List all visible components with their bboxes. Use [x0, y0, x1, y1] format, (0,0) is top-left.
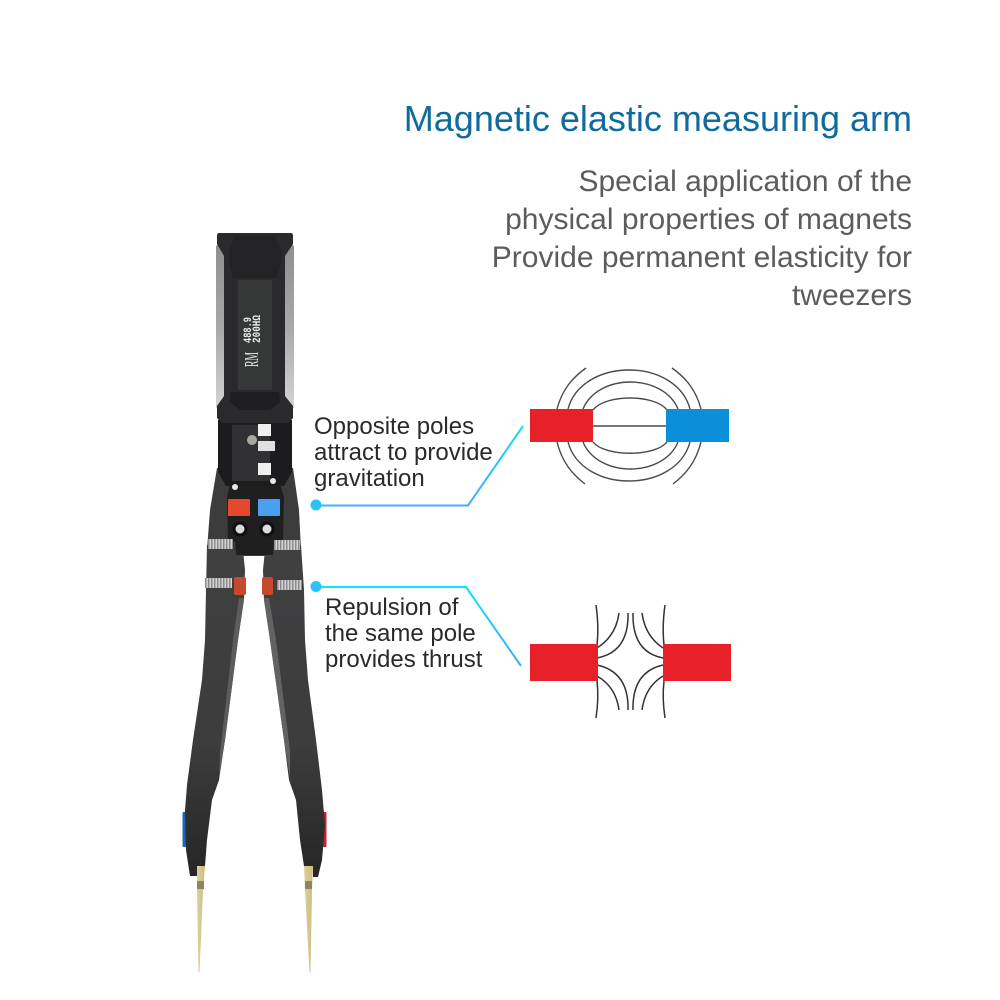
attraction magnet diagram [530, 368, 729, 484]
display screen [238, 280, 272, 390]
display readout: 200HΩ [252, 315, 264, 343]
description text block: tweezers [792, 279, 912, 312]
left arm [185, 545, 245, 876]
label: same pole [325, 594, 482, 673]
icon: red end tab [321, 812, 326, 847]
label: opposite poles: attract to provide [314, 439, 493, 466]
description text block: Provide permanent elasticity for [492, 241, 912, 274]
icon: red arm magnets [234, 577, 273, 595]
red magnet right [663, 644, 731, 681]
blue magnet [666, 409, 729, 442]
icon: left gold tip [197, 866, 205, 972]
title: Magnetic elastic measuring arm [404, 98, 912, 139]
display readout: RM [241, 352, 263, 367]
callout line: attract [310, 426, 523, 510]
label: same pole: the same pole [325, 620, 476, 647]
label: opposite poles [314, 413, 493, 492]
description text block: Special application of the [578, 165, 912, 198]
centre magnet block [227, 484, 284, 555]
display readout: 488.9 [243, 317, 255, 343]
icon: right gold tip [304, 866, 313, 972]
repulsion magnet diagram [530, 605, 731, 718]
right arm [263, 545, 325, 877]
display readout [241, 315, 264, 367]
field lines [596, 605, 665, 718]
red magnet [530, 409, 593, 442]
red magnet left [530, 644, 598, 681]
device head [216, 233, 294, 423]
icon: springs [205, 539, 302, 590]
icon: red magnet [228, 499, 250, 516]
description text block: physical properties of magnets [505, 203, 912, 236]
label: same pole: provides thrust [325, 646, 482, 673]
icon: screws [234, 523, 273, 535]
label: opposite poles: Opposite poles [314, 413, 474, 440]
arm inner bevel left [219, 598, 244, 778]
arm inner bevel right [264, 598, 290, 778]
label: same pole: Repulsion of [325, 594, 458, 621]
field lines [557, 368, 701, 484]
icon: blue end tab [182, 812, 188, 847]
neck backing [207, 468, 301, 556]
upper hinge section [218, 420, 292, 490]
icon: blue magnet [258, 499, 280, 516]
label: opposite poles: gravitation [314, 465, 425, 492]
description text block [492, 165, 912, 312]
callout line: repulsion [310, 581, 521, 666]
tweezers product image [182, 233, 326, 972]
